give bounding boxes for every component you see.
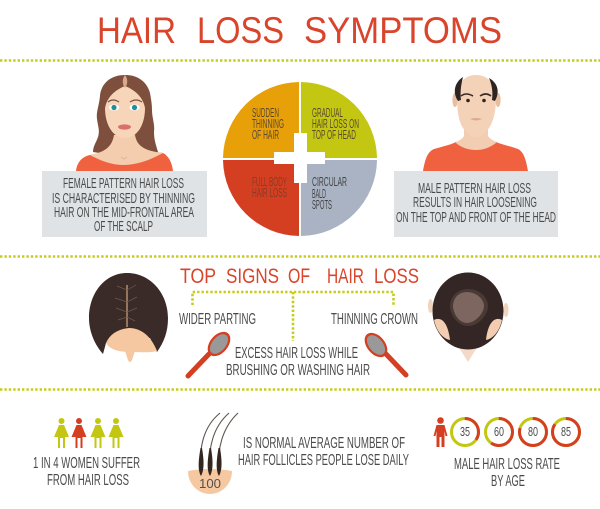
stat: 1 in 4 women: FROM HAIR LOSS [47, 472, 129, 489]
text box: female pattern hair loss: FEMALE PATTERN HAIR LOSS [63, 175, 184, 192]
label: gradual hair loss: HAIR LOSS ON [312, 116, 359, 131]
title: SYMPTOMS [304, 10, 502, 51]
stat: male hair loss by age [434, 417, 580, 490]
icon: hair follicles 100: 100 [199, 476, 221, 491]
text: excess hair loss: EXCESS HAIR LOSS WHILE [235, 345, 358, 362]
title [97, 10, 502, 51]
ring 85: 85 [561, 425, 571, 439]
text box: female pattern hair loss [42, 171, 207, 237]
text box: female pattern hair loss: OF THE SCALP [94, 218, 153, 235]
icon: women figures [54, 418, 124, 448]
label: sudden thinning [252, 105, 284, 142]
ring 35: 35 [460, 425, 470, 439]
label: circular bald spots: SPOTS [312, 197, 332, 212]
heading: top signs: OF [288, 265, 310, 288]
stat: male hair loss by age: BY AGE [491, 473, 525, 490]
ring 35 [452, 418, 478, 446]
text: excess hair loss: BRUSHING OR WASHING HAIR [226, 362, 370, 379]
text: thinning crown: THINNING CROWN [331, 311, 418, 328]
text: normal average [238, 435, 409, 469]
heading: top signs: LOSS [374, 265, 419, 288]
text: wider parting: WIDER PARTING [179, 311, 256, 328]
label: sudden thinning: SUDDEN [252, 105, 279, 120]
connector brackets [192, 292, 394, 341]
ring 60: 60 [494, 425, 504, 439]
heading: top signs [180, 265, 419, 288]
text: excess hair loss [226, 345, 370, 379]
title: LOSS [197, 10, 284, 51]
ring 85 [552, 418, 580, 446]
label: circular bald spots: CIRCULAR [312, 174, 347, 189]
illustration: female head from above [89, 273, 168, 362]
label: full body hair loss: HAIR LOSS [252, 185, 287, 200]
label: circular bald spots [312, 174, 347, 212]
text: normal average: HAIR FOLLICLES PEOPLE LOSE DAILY [238, 452, 409, 469]
icon: man figure [434, 417, 448, 447]
illustration: woman with thinning hair [76, 75, 173, 171]
heading: top signs: TOP [180, 265, 216, 288]
pie: four symptoms: FULL BODY [252, 174, 287, 189]
illustration: balding man [423, 75, 528, 171]
ring 60 [486, 418, 512, 446]
icon: right hairbrush [360, 328, 406, 375]
icon: plus [274, 133, 325, 183]
heading: top signs: SIGNS [226, 265, 279, 288]
pie: four symptoms [223, 82, 377, 236]
text box: female pattern hair loss: HAIR ON THE MID-FRONTAL AREA [54, 204, 194, 221]
ring 80 [520, 418, 546, 446]
heading: top signs: HAIR [327, 265, 364, 288]
label: gradual hair loss: TOP OF HEAD [312, 127, 356, 142]
title: HAIR [97, 10, 176, 51]
label: gradual hair loss [312, 105, 359, 142]
ring 80: 80 [528, 425, 538, 439]
text: normal average: IS NORMAL AVERAGE NUMBER OF [243, 435, 405, 452]
label: full body hair loss [252, 174, 287, 200]
label: gradual hair loss: GRADUAL [312, 105, 343, 120]
text box: female pattern hair loss: IS CHARACTERISED BY THINNING [52, 190, 195, 207]
icon: hair follicles 100 [188, 413, 238, 494]
stat: 1 in 4 women [33, 418, 140, 489]
label: circular bald spots: BALD [312, 186, 326, 201]
label: sudden thinning: THINNING [252, 116, 284, 131]
icon: left hairbrush [188, 327, 235, 376]
text box: male pattern hair loss [394, 171, 558, 237]
label: sudden thinning: OF HAIR [252, 127, 279, 142]
stat: 1 in 4 women: 1 IN 4 WOMEN SUFFER [33, 455, 140, 472]
illustration: male head from above [428, 272, 508, 362]
